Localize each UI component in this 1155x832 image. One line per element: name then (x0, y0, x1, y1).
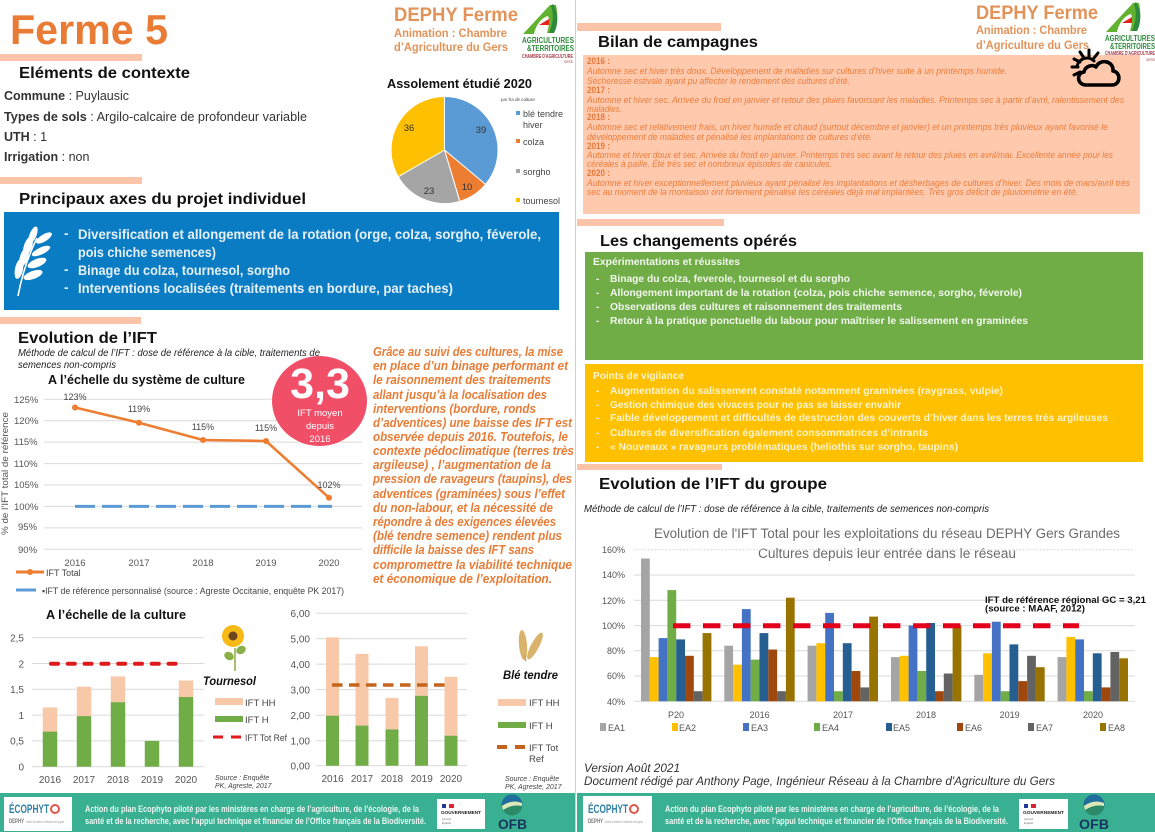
text block: analyse orange: argileuse) , l’augmentation de la (373, 458, 551, 472)
list: axes: - (64, 280, 68, 295)
bar chart: IFT du groupe: Cultures depuis leur entrée dans le réseau (758, 546, 1016, 561)
text block: action du plan Ecophyto right: santé et de la recherche, avec l’appui technique et financier de l’Office français de la Biodiversité. (665, 816, 1008, 827)
panel: expérimentations et réussites: Expérimentations et réussites (593, 257, 740, 268)
text block: contexte: Types de sols : Argilo-calcaire de profondeur variable (4, 110, 307, 124)
logo: Ecophyto left (4, 797, 72, 831)
panel: points de vigilance: Points de vigilance (593, 371, 684, 382)
pie chart: assolement étudié 2020: sorgho (523, 167, 551, 177)
panel: expérimentations et réussites: - (596, 316, 599, 327)
list: axes: Diversification et allongement de la rotation (orge, colza, sorgho, féverole, (78, 227, 541, 242)
line chart: échelle du système de culture: 95% (18, 522, 38, 533)
pie chart: assolement étudié 2020: par ha de culture (500, 97, 535, 102)
panel: points de vigilance: - (596, 386, 599, 397)
header: DEPHY Ferme animation right: d’Agriculture du Gers (976, 38, 1089, 52)
callout: IFT moyen 3,3: 3,3 (290, 360, 350, 408)
pie chart: assolement étudié 2020: 23 (424, 186, 434, 197)
source: blé tendre: PK, Agreste, 2017 (505, 784, 563, 791)
text block: version et rédacteur: Document rédigé par Anthony Page, Ingénieur Réseau à la Chambre d'Agriculture du Gers (584, 776, 1055, 788)
source: blé tendre (505, 776, 563, 791)
heading: Eléments de contexte: Eléments de contexte (19, 65, 190, 82)
line chart: échelle du système de culture: 110% (14, 459, 38, 470)
line chart: échelle du système de culture: 125% (14, 395, 39, 406)
bar chart: IFT du groupe: 2017 (833, 710, 853, 720)
callout: IFT moyen 3,3: depuis (306, 421, 334, 432)
title: Ferme 5: Ferme 5 (10, 6, 168, 53)
legend: blé tendre (497, 698, 560, 765)
label: Tournesol: Tournesol (203, 676, 257, 688)
series: EA6 (685, 650, 1110, 701)
list: axes: Binage du colza, tournesol, sorgho (78, 263, 290, 278)
logo: Ecophyto left: réduire et améliorer l'utilisation des phytos (26, 820, 64, 824)
line chart: échelle du système de culture: 115% (14, 437, 38, 448)
line chart: échelle du système de culture: A l’échelle du système de culture (48, 372, 245, 387)
panel: bilan de campagnes: 2017 : (587, 85, 610, 96)
panel: bilan de campagnes: Automne sec et relativement frais, un hiver humide et chaud (surtout décembre et janvier) et un printemps très pluvieux ayant favorisé le (586, 122, 1108, 133)
text block: contexte: Commune : Puylausic (4, 89, 129, 103)
list: axes: Interventions localisées (traitements en bordure, par taches) (78, 281, 453, 296)
bar chart: blé tendre: 2018 (381, 774, 404, 785)
pie chart: assolement étudié 2020: colza (523, 137, 544, 147)
text block: analyse orange: allant jusqu’à la localisation des (373, 388, 547, 402)
text block: analyse orange: difficile la baisse des IFT sans (373, 543, 534, 557)
bar chart: tournesol: 1 (18, 711, 24, 722)
text block: analyse orange: et économique de l’exploitation. (373, 572, 552, 586)
logo: OFB right (1079, 794, 1109, 832)
line chart: échelle du système de culture: % de l’IFT total de référence (0, 412, 11, 535)
line chart: échelle du système de culture: IFT Total (46, 568, 81, 578)
callout: IFT moyen 3,3: IFT moyen (297, 408, 343, 419)
legend: EA1 à EA8: EA1 (608, 723, 625, 733)
legend: blé tendre: IFT Tot (529, 743, 559, 754)
callout: IFT moyen 3,3: 2016 (309, 434, 331, 445)
pie chart: assolement étudié 2020: 10 (462, 182, 472, 193)
panel: bilan de campagnes: sec au moment de la montaison ont fortement pénalisé les céréales déjà mal implantées. Très gros déficit de pluviométrie en été. (587, 187, 1078, 198)
bar chart: tournesol: 0 (18, 762, 24, 774)
series: EA4 (667, 590, 1093, 701)
heading: Bilan de campagnes: Bilan de campagnes (598, 34, 758, 51)
logo: Agricultures et Territoires left (522, 4, 575, 64)
source: tournesol (215, 775, 273, 790)
legend: tournesol: IFT Tot Ref (245, 733, 287, 744)
bar chart: blé tendre: 2,00 (291, 711, 310, 722)
list: axes: - (64, 226, 68, 241)
logo: Agricultures et Territoires right (1103, 2, 1155, 62)
text block: action du plan Ecophyto left: Action du plan Ecophyto piloté par les ministères en charge de l’agriculture, de l’écologie, de la (85, 804, 420, 815)
heading: Les changements opérés: Les changements opérés (600, 233, 797, 250)
bar chart: IFT du groupe: Evolution de l'IFT Total pour les exploitations du réseau DEPHY Gers Grandes (654, 526, 1120, 541)
logo: OFB right: OFB (1079, 817, 1109, 832)
text block: méthode de calcul: semences non-compris (18, 360, 116, 371)
footer: left (0, 793, 575, 832)
legend: blé tendre: IFT HH (529, 698, 560, 709)
logo: Ecophyto right: DEPHY (588, 818, 603, 825)
logo: Agricultures et Territoires left: CHAMBRE D'AGRICULTURE (522, 54, 573, 60)
bar chart: blé tendre: 0,00 (291, 762, 310, 772)
bar chart: tournesol (10, 634, 204, 786)
header: DEPHY Ferme animation left (394, 5, 518, 54)
bar chart: blé tendre (291, 609, 467, 785)
heading: Principaux axes du projet individuel: Principaux axes du projet individuel (19, 191, 306, 208)
text block: version et rédacteur (584, 763, 1055, 788)
panel: expérimentations et réussites: Observations des cultures et raisonnement des traitements (610, 302, 902, 313)
text block: analyse orange: (blé tendre semence) rendent plus (373, 529, 562, 543)
header: DEPHY Ferme animation left: DEPHY Ferme (394, 5, 518, 26)
panel: points de vigilance: - (596, 400, 599, 411)
logo: Gouvernement left: Égalité (442, 820, 452, 825)
logo: Ecophyto left: ÉCOPHYT (9, 801, 49, 816)
line chart: échelle du système de culture: 2020 (318, 558, 340, 569)
legend: EA1 à EA8: EA3 (751, 723, 768, 733)
panel: bilan de campagnes: Sécheresse estivale ayant pu affecter le rendement des cultures d’été. (587, 76, 850, 87)
line chart: échelle du système de culture: 105% (14, 480, 39, 491)
logo: Gouvernement right: Égalité (1024, 820, 1034, 825)
logo: Gouvernement left: GOUVERNEMENT (441, 810, 481, 815)
header: DEPHY Ferme animation left: d’Agriculture du Gers (394, 40, 508, 54)
text block: analyse orange: du non-labour, et la nécessité de (373, 501, 553, 515)
panel: bilan de campagnes: céréales à paille. Été très sec et nombreux épisodes de canicules. (587, 159, 832, 170)
list: axes: - (64, 262, 68, 277)
text block: analyse orange: d’adventices) une baisse des IFT est (373, 416, 573, 430)
series: EA5 (676, 623, 1102, 701)
panel: expérimentations et réussites: - (596, 288, 599, 299)
panel: points de vigilance: - (596, 442, 599, 453)
panel: expérimentations et réussites: Binage du colza, feverole, tournesol et du sorgho (610, 274, 850, 285)
text block: analyse orange (372, 345, 574, 586)
panel: expérimentations et réussites: Allongement important de la rotation (colza, pois chiche semence, sorgho, féverole) (610, 288, 1022, 299)
series: EA8 (703, 598, 1128, 701)
header: DEPHY Ferme animation right (976, 3, 1098, 52)
bar chart: tournesol: 1,5 (10, 685, 24, 696)
logo: Gouvernement left (437, 799, 485, 829)
panel: points de vigilance: « Nouveaux » ravageurs problématiques (heliothis sur sorgho, taupins) (610, 442, 958, 453)
panel: points de vigilance: Augmentation du salissement constaté notamment graminées (raygrass, vulpie) (610, 386, 1003, 397)
text block: analyse orange: adventices (graminées) sous l’effet (373, 487, 566, 501)
bar chart: blé tendre: 2019 (411, 774, 433, 785)
text block: contexte: UTH : 1 (4, 130, 47, 144)
bar chart: IFT du groupe: 100% (602, 621, 625, 631)
pie chart: assolement étudié 2020: 39 (476, 125, 486, 136)
text block: contexte: Irrigation : non (4, 150, 89, 164)
panel: expérimentations et réussites: - (596, 274, 599, 285)
panel: expérimentations et réussites: Retour à la pratique ponctuelle du labour pour maîtriser le salissement en graminées (610, 316, 1028, 327)
heading: Evolution de l'IFT: Evolution de l’IFT (18, 330, 157, 347)
logo: Gouvernement right: GOUVERNEMENT (1023, 810, 1064, 815)
legend: tournesol: IFT H (245, 715, 269, 726)
logo: Agricultures et Territoires left: GERS (564, 59, 573, 64)
bar chart: tournesol: 0,5 (10, 736, 24, 748)
logo: Gouvernement left: Liberté (442, 817, 452, 821)
logo: OFB left (498, 794, 527, 832)
bar chart: IFT du groupe: 120% (602, 596, 625, 606)
header: DEPHY Ferme animation left: Animation : Chambre (394, 26, 507, 40)
pie chart: assolement étudié 2020: Assolement étudié 2020 (387, 77, 532, 91)
bar chart: IFT du groupe: 40% (607, 697, 625, 707)
legend: EA1 à EA8: EA4 (822, 723, 839, 733)
text block: analyse orange: en place d’un binage performant et (373, 359, 569, 373)
list: axes: pois chiche semences) (78, 245, 216, 260)
bar chart: IFT du groupe: 80% (607, 646, 625, 656)
legend: tournesol (213, 698, 287, 744)
panel: bilan de campagnes: 2020 : (587, 168, 610, 179)
bar chart: IFT du groupe (600, 526, 1147, 733)
panel: points de vigilance: - (596, 428, 599, 439)
line chart: échelle du système de culture: 115% (255, 423, 277, 433)
bar chart: tournesol: 2,5 (10, 634, 24, 644)
label: Blé tendre: Blé tendre (503, 670, 559, 682)
pie chart: assolement étudié 2020 (387, 77, 563, 206)
bar chart: blé tendre: 5,00 (291, 634, 310, 646)
bar chart: blé tendre: 4,00 (291, 660, 310, 671)
text block: analyse orange: le raisonnement des traitements (373, 373, 551, 387)
text block: analyse orange: répondre à des exigences élevées (373, 515, 556, 529)
header: DEPHY Ferme animation right: Animation : Chambre (976, 23, 1087, 37)
panel: bilan de campagnes: développement de maladies et pénalisé les implantations de cultures d’été. (587, 132, 872, 143)
logo: Agricultures et Territoires left: &TERRITOIRES (527, 44, 575, 53)
pie chart: assolement étudié 2020: tournesol (523, 196, 560, 206)
text block: analyse orange: pression de ravageurs (taupins), des (372, 472, 572, 486)
panel: points de vigilance: - (596, 413, 599, 424)
text block: action du plan Ecophyto left (85, 804, 426, 827)
heading: A l'échelle de la culture: A l’échelle de la culture (46, 607, 186, 622)
panel: bilan de campagnes: 2019 : (587, 141, 610, 152)
legend: EA1 à EA8: EA7 (1036, 723, 1053, 733)
legend: tournesol: IFT HH (245, 698, 276, 709)
legend: blé tendre: IFT H (529, 721, 553, 732)
legend: EA1 à EA8: EA6 (965, 723, 982, 733)
heading: Evolution de l'IFT du groupe: Evolution de l’IFT du groupe (599, 476, 827, 493)
bar chart: IFT du groupe: P20 (668, 710, 684, 720)
icon: sun behind cloud (1072, 50, 1119, 85)
callout: IFT moyen 3,3 (272, 356, 367, 446)
legend: EA1 à EA8: EA8 (1108, 723, 1125, 733)
line chart: échelle du système de culture: 115% (192, 422, 214, 432)
text block: contexte (4, 89, 307, 164)
header: DEPHY Ferme animation right: DEPHY Ferme (976, 3, 1098, 24)
line chart: échelle du système de culture: 123% (63, 392, 87, 402)
bar chart: blé tendre: 2017 (351, 774, 374, 785)
bar chart: blé tendre: 2020 (440, 774, 463, 785)
text block: méthode de calcul: Méthode de calcul de l’IFT : dose de référence à la cible, traitements de (18, 348, 320, 359)
pie chart: assolement étudié 2020: hiver (523, 120, 543, 130)
bar chart: tournesol: 2018 (107, 775, 130, 786)
panel: bilan de campagnes (583, 55, 1140, 214)
legend: EA1 à EA8: EA5 (893, 723, 910, 733)
bar chart: tournesol: 2016 (39, 775, 62, 786)
bar chart: IFT du groupe: 2018 (916, 710, 936, 720)
panel: points de vigilance: Gestion chimique des vivaces pour ne pas se laisser envahir (610, 400, 901, 411)
line chart: échelle du système de culture: 120% (14, 416, 39, 427)
line chart: échelle du système de culture: 90% (18, 545, 38, 556)
panel: bilan de campagnes: Automne sec et hiver très doux. Développement de maladies sur cultures d’hiver suite à un printemps humide. (586, 66, 1007, 77)
bar chart: IFT du groupe: 2020 (1083, 710, 1103, 720)
icon: wheat ear (13, 225, 53, 296)
bar chart: blé tendre: 3,00 (291, 686, 310, 696)
line chart: échelle du système de culture: 100% (14, 502, 39, 513)
bar chart: blé tendre: 2016 (321, 774, 344, 785)
list: axes (64, 226, 541, 296)
icon: wheat (518, 630, 546, 661)
bar chart: tournesol: 2017 (73, 775, 96, 786)
bar chart: blé tendre: 6,00 (291, 609, 310, 620)
line chart: échelle du système de culture: 2016 (64, 558, 86, 569)
panel: bilan de campagnes: maladies. (587, 104, 622, 115)
text block: méthode de calcul groupe: Méthode de calcul de l’IFT : dose de référence à la cible, traitements de semences non-compris (584, 504, 989, 515)
bar chart: tournesol: 2020 (175, 775, 198, 786)
text block: action du plan Ecophyto left: santé et de la recherche, avec l’appui technique et financier de l’Office français de la Biodiversité. (85, 816, 426, 827)
logo: Ecophyto right (583, 796, 652, 832)
line chart: échelle du système de culture: 2018 (192, 558, 214, 569)
bar chart: IFT du groupe: IFT de référence régional GC = 3,21 (985, 595, 1147, 606)
pie chart: assolement étudié 2020: blé tendre (523, 109, 563, 119)
text block: action du plan Ecophyto right: Action du plan Ecophyto piloté par les ministères en charge de l’agriculture, de l’écologie, de la (665, 804, 1000, 815)
text block: analyse orange: Grâce au suivi des cultures, la mise (373, 345, 563, 359)
line chart: échelle du système de culture (0, 372, 362, 596)
line chart: échelle du système de culture: 2019 (255, 558, 277, 569)
line chart: échelle du système de culture: 2017 (128, 558, 150, 569)
bar chart: IFT du groupe: (source : MAAF, 2012) (985, 604, 1085, 614)
series: EA7 (694, 652, 1119, 701)
bar chart: IFT du groupe: 140% (602, 570, 625, 580)
text block: analyse orange: interventions (bordure, ronds (373, 402, 536, 416)
bar chart: IFT du groupe: 60% (607, 671, 625, 681)
text block: analyse orange: observée depuis 2016. Toutefois, le (373, 430, 568, 444)
bar chart: IFT du groupe: 2016 (750, 710, 770, 720)
panel: expérimentations et réussites: - (596, 302, 599, 313)
bar chart: tournesol: 2 (18, 660, 24, 670)
pie chart: assolement étudié 2020: 36 (404, 123, 414, 134)
logo: Ecophyto left: DEPHY (9, 818, 24, 825)
logo: Ecophyto right: ÉCOPHYT (588, 801, 628, 816)
line chart: échelle du système de culture: 102% (317, 480, 341, 490)
legend: blé tendre: Ref (529, 754, 544, 765)
text block: analyse orange: compromettre la viabilité technique (373, 558, 572, 572)
source: tournesol: PK, Agreste, 2017 (215, 783, 273, 790)
line chart: échelle du système de culture: ▪IFT de référence personnalisé (source : Agreste Occitanie, enquête PK 2017) (42, 586, 344, 596)
panel: bilan de campagnes: 2018 : (587, 112, 610, 123)
text block: action du plan Ecophyto right (665, 804, 1008, 827)
panel: axes du projet (4, 212, 559, 310)
panel: points de vigilance: Faible développement et difficultés de destruction des couverts d’hiver dans les terres très argileuses (610, 413, 1108, 424)
text block: analyse orange: contexte pédoclimatique (terres très (373, 444, 574, 458)
legend: EA1 à EA8: EA2 (679, 723, 696, 733)
logo: Gouvernement right (1019, 799, 1068, 829)
bar chart: IFT du groupe: 2019 (1000, 710, 1020, 720)
bar chart: tournesol: 2019 (141, 775, 164, 786)
series: EA1 (641, 558, 1066, 701)
series: EA2 (650, 637, 1075, 701)
panel: bilan de campagnes: 2016 : (587, 56, 610, 67)
text block: méthode de calcul (18, 348, 320, 371)
panel: points de vigilance (585, 364, 1143, 462)
series: EA3 (659, 609, 1084, 701)
bar chart: IFT du groupe: 160% (602, 545, 625, 555)
text block: version et rédacteur: Version Août 2021 (584, 763, 680, 775)
icon: sunflower (222, 625, 247, 671)
logo: OFB left: OFB (498, 817, 527, 832)
source: tournesol: Source : Enquête (215, 775, 269, 782)
logo: Ecophyto right: réduire et améliorer l'utilisation des phytos (605, 820, 643, 824)
logo: Gouvernement right: Liberté (1024, 817, 1034, 821)
legend: EA1 à EA8 (600, 723, 1125, 733)
logo: Agricultures et Territoires left: AGRICULTURES (522, 36, 575, 45)
bar chart: blé tendre: 1,00 (291, 736, 310, 748)
line chart: échelle du système de culture: 119% (128, 404, 150, 414)
source: blé tendre: Source : Enquête (505, 776, 559, 783)
footer: right (577, 793, 1155, 832)
panel: expérimentations et réussites (585, 252, 1143, 360)
panel: points de vigilance: Cultures de diversification également consommatrices d’intrants (610, 428, 928, 439)
